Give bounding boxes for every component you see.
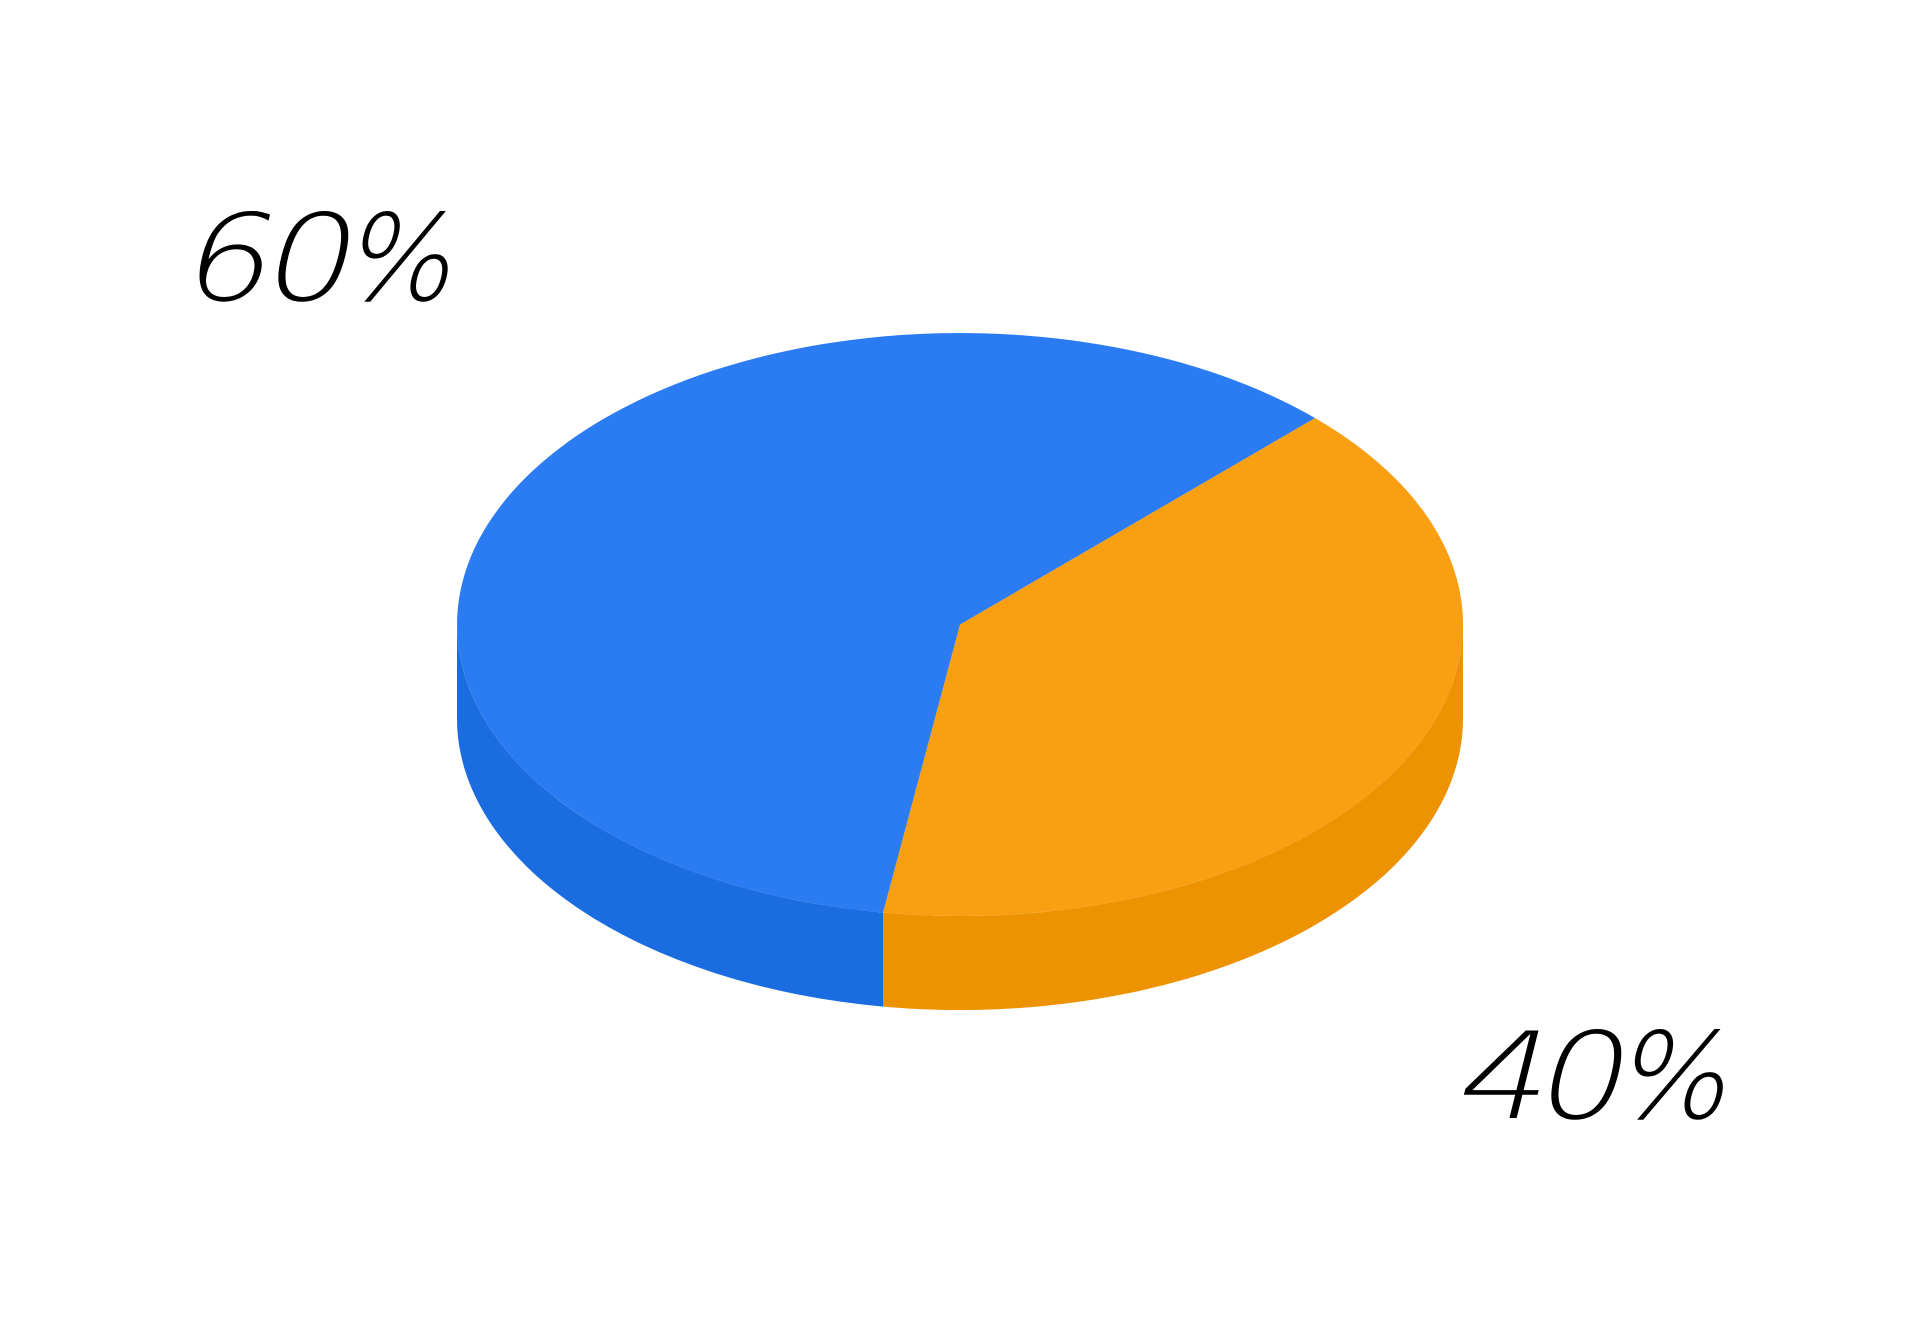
label: 40%: 4 xyxy=(1444,1007,1571,1146)
orange slice top, 40% xyxy=(883,418,1463,916)
label: 60%: % xyxy=(332,190,477,329)
orange slice side wall xyxy=(883,624,1463,1010)
label: 40% xyxy=(1444,1007,1753,1147)
label: 40%: % xyxy=(1604,1007,1753,1147)
label: 60%: 0 xyxy=(251,189,375,329)
label: 60% xyxy=(171,188,477,329)
label: 40%: 0 xyxy=(1524,1007,1648,1147)
label: 60%: 6 xyxy=(171,188,294,328)
blue slice side wall xyxy=(457,624,883,1007)
isometric pie chart xyxy=(457,333,1463,1010)
blue slice top, 60% xyxy=(457,333,1315,913)
